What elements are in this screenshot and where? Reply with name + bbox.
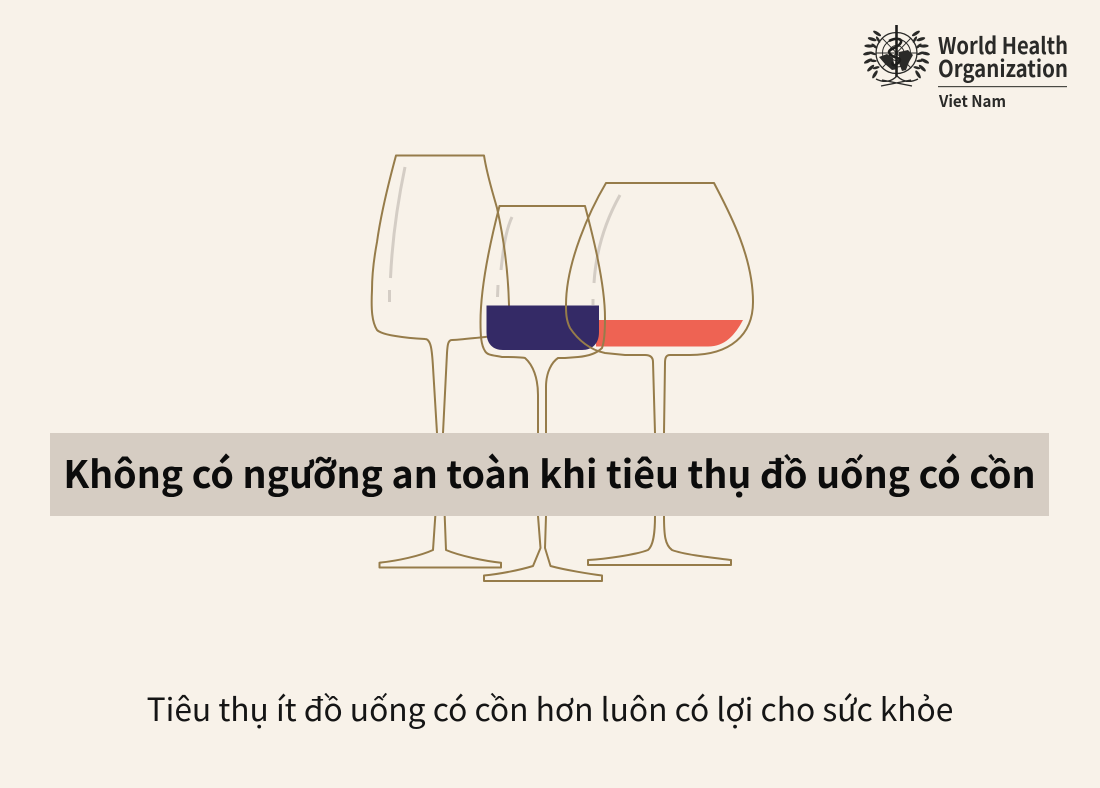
laurel stems (876, 76, 918, 86)
glass: centre small (480, 206, 605, 581)
organisation name: Viet Nam (938, 88, 1006, 112)
glass: right wide (566, 183, 753, 565)
WHO logo (863, 25, 1068, 112)
wine fill: red (596, 320, 743, 346)
staff and serpent (895, 25, 898, 77)
icon: WHO emblem (863, 25, 930, 86)
globe grid (876, 32, 917, 74)
title: Không có ngưỡng an toàn khi tiêu thụ đồ uống có cồn (63, 444, 1036, 499)
subtitle: Tiêu thụ ít đồ uống có cồn hơn luôn có lợi cho sức khỏe (147, 685, 953, 731)
wine fill: navy (486, 306, 599, 350)
title band (50, 433, 1049, 516)
continents (879, 50, 913, 71)
glass highlights (390, 167, 620, 305)
laurel right (911, 30, 930, 79)
glass: left tall (372, 156, 509, 568)
laurel left (863, 30, 882, 79)
organisation name (938, 27, 1068, 112)
logo divider (938, 86, 1067, 87)
